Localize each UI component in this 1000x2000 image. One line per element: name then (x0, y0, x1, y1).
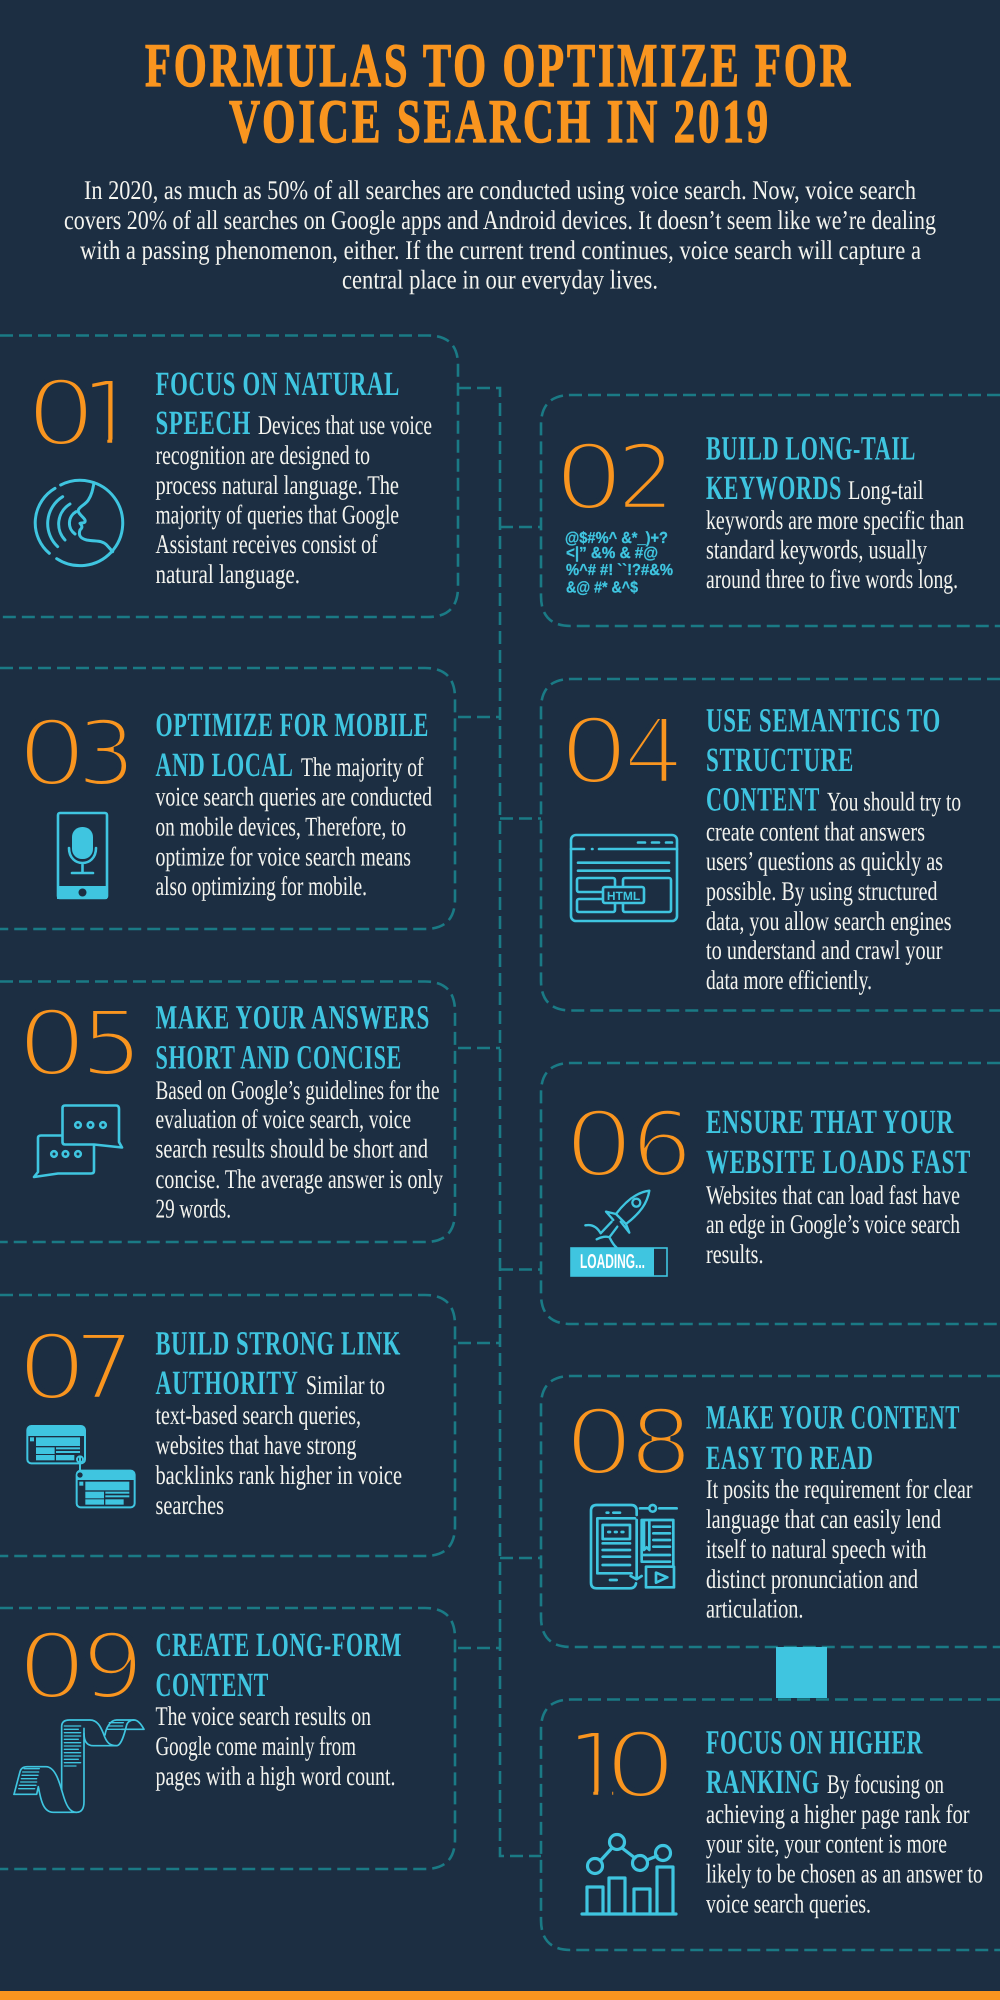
text: 10: voice search queries. (706, 1888, 871, 1918)
text: 03: also optimizing for mobile. (156, 871, 367, 901)
panel: 07 link authority (0, 1295, 455, 1556)
number 08: 8 (629, 1391, 693, 1496)
text: 01 (156, 366, 432, 589)
text: 01: recognition are designed to (156, 440, 370, 470)
text: 02: KEYWORDS (706, 470, 842, 507)
text: 07: backlinks rank higher in voice (156, 1460, 402, 1490)
text: 09: Google come mainly from (156, 1731, 356, 1761)
number 03: 0 (17, 702, 87, 807)
text: 01: Assistant receives consist of (156, 529, 378, 559)
icon: paper scroll (14, 1720, 144, 1812)
text: 03 (156, 707, 432, 901)
number 05 (17, 992, 143, 1097)
text: 05: SHORT AND CONCISE (156, 1040, 402, 1076)
text: 03: OPTIMIZE FOR MOBILE (156, 707, 429, 744)
number 10 (566, 1714, 677, 1819)
number 01: 1 (80, 362, 138, 467)
icon: rising bar chart (582, 1834, 676, 1914)
connector lines (458, 388, 541, 1856)
text: 05: evaluation of voice search, voice (156, 1104, 411, 1134)
text: 08 (706, 1400, 972, 1624)
number 09: 9 (82, 1615, 144, 1720)
text: 05: Based on Google’s guidelines for the (156, 1075, 440, 1105)
text: 04 (706, 702, 961, 995)
panel: 08 easy to read (541, 1376, 1000, 1647)
text: 01: process natural language. The (156, 470, 399, 500)
text: 01: majority of queries that Google (156, 500, 399, 530)
text: 09 (156, 1627, 402, 1791)
text: 04: create content that answers (706, 816, 925, 846)
text: 07 (156, 1326, 402, 1520)
icon: linked browser windows (27, 1426, 135, 1507)
icon: keyword symbols: <|” &% & #@ (566, 545, 658, 562)
number 07 (17, 1316, 135, 1421)
text: 01: Devices that use voice (258, 410, 432, 440)
number 02: 2 (616, 426, 676, 531)
panel: 03 mobile and local (0, 668, 455, 929)
icon: keyword symbols: @$#%^ &*_)+? (565, 530, 668, 547)
number 06: 6 (631, 1093, 693, 1198)
text: 10: By focusing on (827, 1769, 944, 1799)
number 04: 0 (559, 700, 629, 805)
intro paragraph (64, 175, 936, 294)
number 07: 0 (17, 1316, 87, 1421)
icon: phone and book (591, 1505, 677, 1588)
number 09: 0 (17, 1615, 87, 1720)
text: 01: natural language. (156, 559, 300, 589)
icon: keyword symbols: &@ #* &^$ (566, 580, 638, 596)
text: 07: searches (156, 1490, 224, 1520)
text: 09: The voice search results on (156, 1701, 371, 1731)
icon: rocket and loading bar (571, 1191, 667, 1276)
icon: phone with microphone (57, 813, 107, 899)
panel: 01 natural speech (0, 336, 458, 617)
text: 03: optimize for voice search means (156, 842, 411, 872)
text: 05: 29 words. (156, 1194, 231, 1224)
text: 08: itself to natural speech with (706, 1534, 927, 1564)
number 03 (17, 702, 136, 807)
text: 01: FOCUS ON NATURAL (156, 366, 400, 403)
number 06 (564, 1093, 693, 1198)
text: 03: voice search queries are conducted (156, 782, 432, 812)
text: 03: AND LOCAL (156, 747, 294, 784)
text: 08: articulation. (706, 1594, 804, 1624)
text: 07: BUILD STRONG LINK (156, 1326, 401, 1362)
text: 08: EASY TO READ (706, 1440, 874, 1477)
number 05: 0 (17, 992, 87, 1097)
number 08: 0 (564, 1391, 634, 1496)
text: 07: text-based search queries, (156, 1400, 361, 1430)
panel: 05 short answers (0, 982, 455, 1242)
number 02: 0 (554, 426, 624, 531)
text: 02: standard keywords, usually (706, 534, 927, 564)
title: VOICE SEARCH IN 2019 (229, 88, 771, 156)
text: 10 (706, 1724, 983, 1918)
icon: keyword symbols: %^# #! ``!?#&% (566, 562, 673, 579)
number 10: 1 (566, 1714, 624, 1819)
number 02 (554, 426, 676, 531)
number 07: 7 (73, 1316, 135, 1421)
number 04 (559, 700, 684, 805)
text: 09: CREATE LONG-FORM (156, 1627, 402, 1664)
text: 03: The majority of (301, 752, 424, 782)
panel: 04 semantics (541, 679, 1000, 1010)
text: 08: distinct pronunciation and (706, 1564, 918, 1594)
text: 09: pages with a high word count. (156, 1761, 396, 1791)
text: 07: AUTHORITY (156, 1365, 298, 1402)
panel: 02 long-tail keywords (541, 395, 1000, 626)
text: 04: CONTENT (706, 782, 820, 818)
text: 04: STRUCTURE (706, 742, 854, 779)
number 01: 0 (26, 362, 96, 467)
text: 07: websites that have strong (156, 1430, 356, 1460)
number 09 (17, 1615, 144, 1720)
icon: chat bubbles (34, 1106, 122, 1177)
text: 05: concise. The average answer is only (156, 1164, 443, 1194)
text: 09: CONTENT (156, 1667, 269, 1704)
icon: html window (571, 835, 677, 921)
text: 06: results. (706, 1239, 764, 1269)
text: 05 (156, 1000, 443, 1224)
text: 02: Long-tail (848, 475, 924, 505)
panel: 10 higher ranking (541, 1700, 1000, 1950)
icon: speaking face (35, 480, 123, 566)
text: 01: SPEECH (156, 405, 251, 442)
text: 04: data more efficiently. (706, 965, 872, 995)
number 03: 3 (76, 702, 136, 807)
text: 03: on mobile devices, Therefore, to (156, 812, 406, 842)
intro paragraph: central place in our everyday lives. (342, 264, 658, 294)
number 08 (564, 1391, 693, 1496)
blue block between panels (776, 1647, 827, 1698)
number 01 (26, 362, 138, 467)
icon: rocket and loading bar: LOADING... (580, 1251, 645, 1273)
text: 05: MAKE YOUR ANSWERS (156, 1000, 430, 1036)
icon: html window: HTML (607, 889, 640, 903)
title (145, 32, 853, 156)
text: 06 (706, 1104, 971, 1269)
text: 10: RANKING (706, 1764, 820, 1801)
panel: 06 loads fast (541, 1063, 1000, 1324)
footer bar (0, 1991, 1000, 2000)
text: 05: search results should be short and (156, 1134, 428, 1164)
number 06: 0 (564, 1093, 634, 1198)
text: 07: Similar to (306, 1370, 385, 1400)
icon: keyword symbols (565, 530, 673, 596)
text: 02 (706, 430, 964, 594)
number 04: 4 (623, 700, 684, 805)
number 05: 5 (80, 992, 143, 1097)
number 10: 0 (604, 1714, 677, 1819)
panel: 09 long-form content (0, 1608, 455, 1869)
